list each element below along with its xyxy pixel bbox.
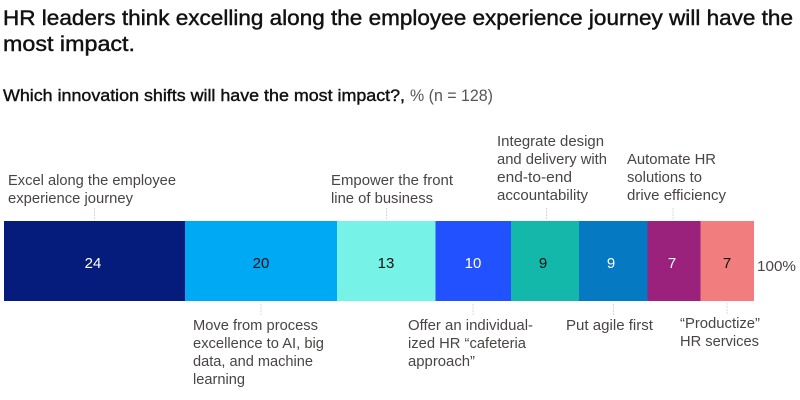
label: process excellence to AI: excellence to AI, big — [193, 336, 324, 352]
segment: excel along the journey, 24 — [4, 221, 185, 301]
label: process excellence to AI: data, and machine — [193, 354, 313, 370]
label: automate HR solutions — [627, 152, 727, 219]
label: individualized HR cafeteria approach — [408, 304, 533, 370]
segment: empower the front line, 13 — [337, 221, 436, 301]
label: excel along the employee experience journey: experience journey — [8, 191, 134, 207]
label: integrate design and delivery: end-to-end — [497, 170, 572, 186]
label: empower the front line — [331, 173, 453, 219]
segment: individualized HR, 10: 10 — [465, 255, 481, 272]
segment: individualized HR, 10 — [436, 221, 511, 301]
label: process excellence to AI — [193, 304, 324, 388]
label: empower the front line: line of business — [331, 191, 433, 207]
subtitle: Which innovation shifts will have the most impact?, — [3, 87, 405, 105]
title: HR leaders think excelling along the employee experience journey will have the — [3, 6, 793, 30]
label: productize HR services: “Productize” — [680, 316, 760, 332]
segment: process excellence to AI, 20: 20 — [253, 255, 269, 272]
label: productize HR services — [680, 303, 760, 350]
segment: process excellence to AI, 20 — [185, 221, 337, 301]
segment: automate HR, 7 — [648, 221, 700, 301]
label: process excellence to AI: Move from process — [193, 318, 318, 334]
label: integrate design and delivery: accountability — [497, 188, 589, 204]
label: excel along the employee experience journey — [8, 173, 176, 219]
label: excel along the employee experience journey: Excel along the employee — [8, 173, 176, 189]
segment: productize HR, 7 — [700, 221, 754, 301]
segment: empower the front line, 13: 13 — [378, 255, 394, 272]
segment: excel along the journey, 24: 24 — [85, 255, 101, 272]
label: individualized HR cafeteria approach: approach” — [408, 354, 475, 370]
label: integrate design and delivery: Integrate design — [497, 134, 604, 150]
label: automate HR solutions: solutions to — [627, 170, 702, 186]
label: individualized HR cafeteria approach: ized HR “cafeteria — [408, 336, 527, 352]
segment: integrate design and delivery, 9: 9 — [539, 255, 547, 272]
total label: 100% — [757, 258, 796, 275]
segment: put agile first, 9: 9 — [607, 255, 615, 272]
segment: put agile first, 9 — [579, 221, 648, 301]
title — [3, 6, 793, 56]
label: productize HR services: HR services — [680, 334, 759, 350]
label: process excellence to AI: learning — [193, 372, 245, 388]
label: integrate design and delivery: and delivery with — [497, 152, 607, 168]
label: put agile first — [566, 304, 653, 334]
label: put agile first: Put agile first — [566, 318, 653, 334]
segment: productize HR, 7: 7 — [723, 255, 731, 272]
label: automate HR solutions: drive efficiency — [627, 188, 727, 204]
segment: integrate design and delivery, 9 — [511, 221, 579, 301]
label: automate HR solutions: Automate HR — [627, 152, 716, 168]
subtitle: % (n = 128) — [410, 87, 493, 105]
label: integrate design and delivery — [497, 134, 607, 219]
label: empower the front line: Empower the front — [331, 173, 453, 189]
label: individualized HR cafeteria approach: Offer an individual- — [408, 318, 533, 334]
segment: automate HR, 7: 7 — [668, 255, 676, 272]
stacked bar chart — [4, 221, 754, 301]
title: most impact. — [3, 32, 135, 56]
